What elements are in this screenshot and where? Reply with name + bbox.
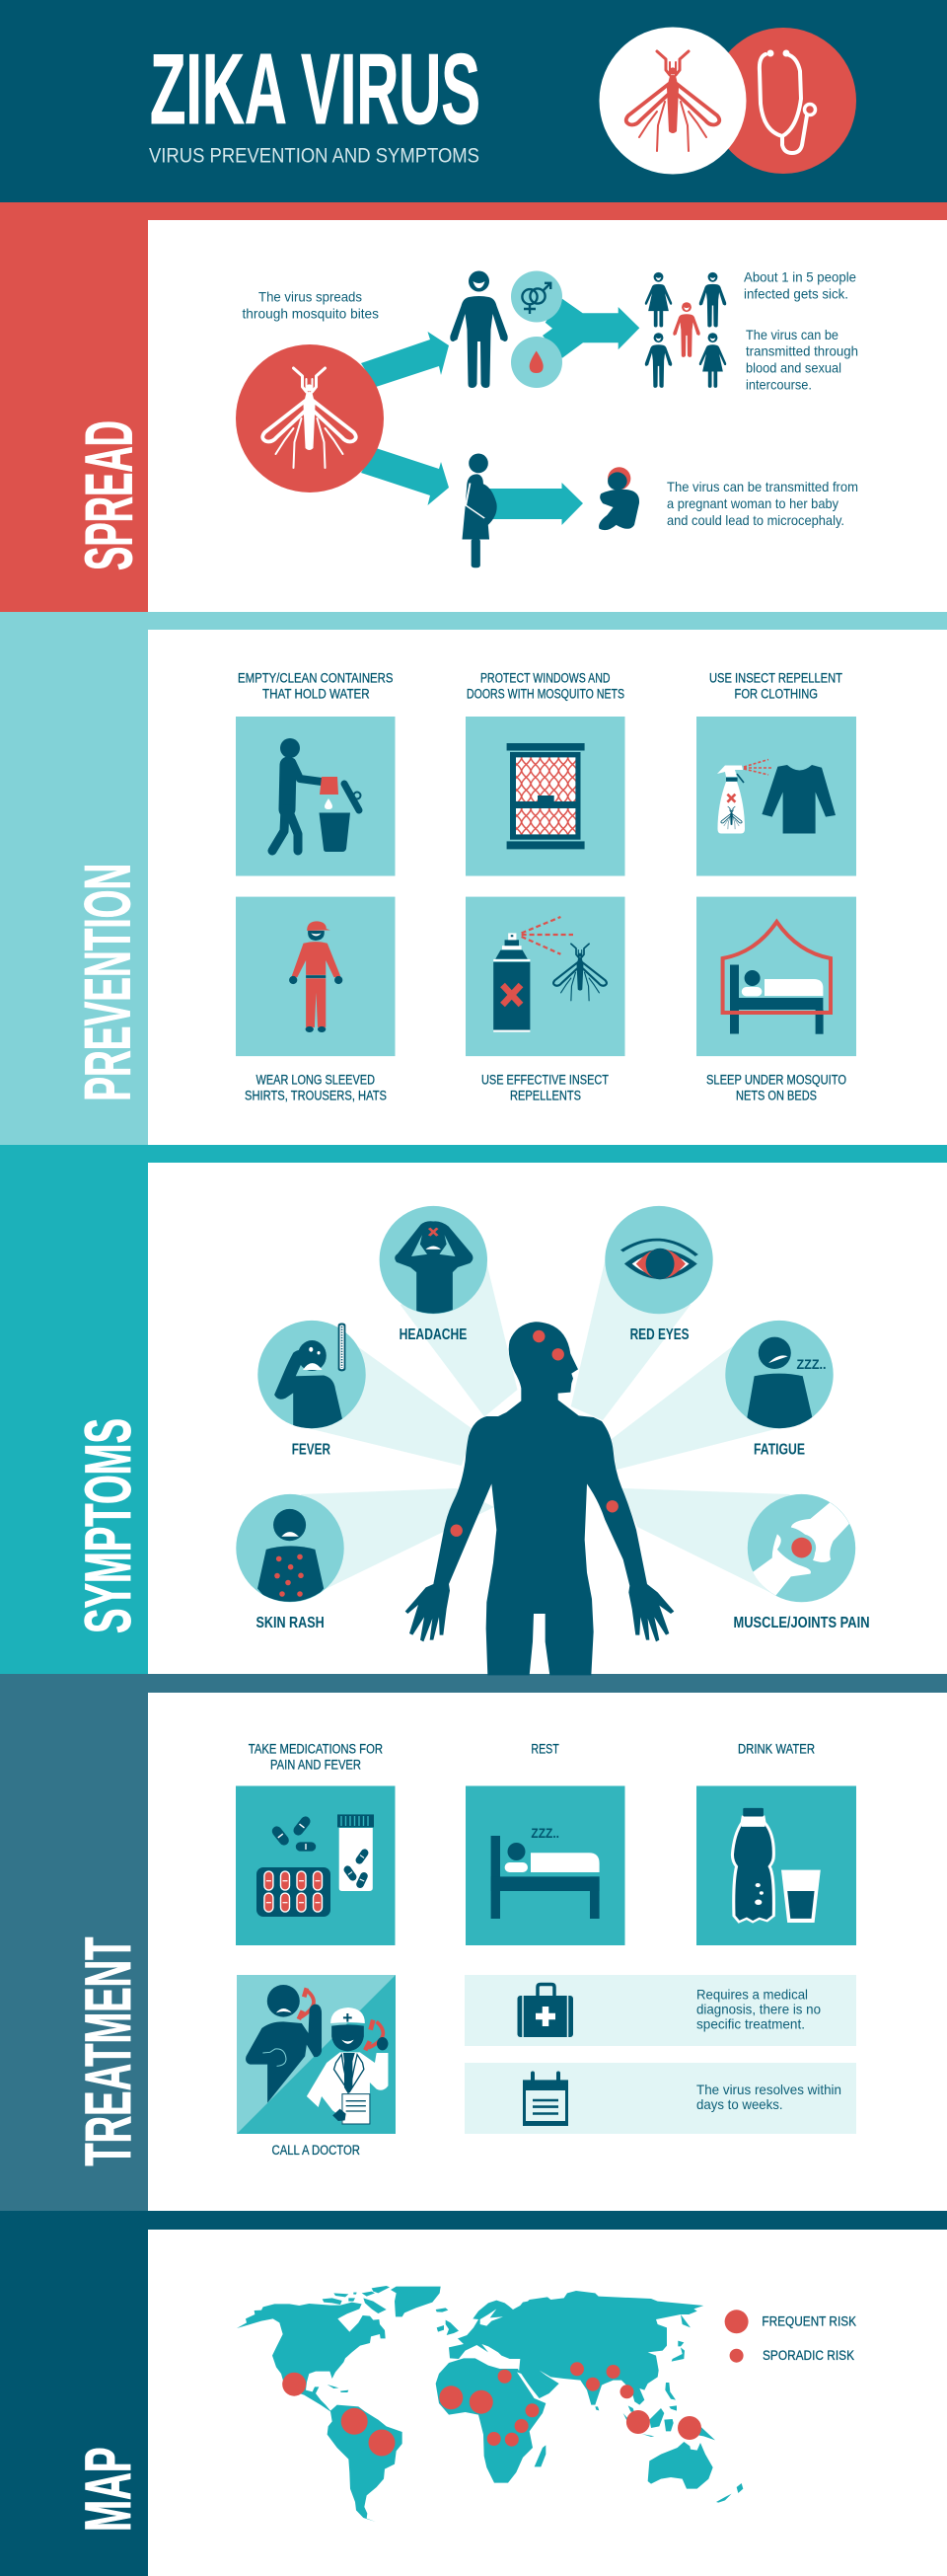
tile: emptying container	[236, 717, 395, 876]
icon: baby	[599, 467, 639, 530]
tile: medication	[236, 1786, 395, 1945]
text: blood and sexual transmission: transmitted through	[746, 343, 858, 359]
text: diagnosis	[696, 1986, 821, 2032]
icon: group of five people	[645, 272, 726, 388]
section band: symptoms	[0, 1145, 947, 1674]
icon: medical kit	[517, 1984, 573, 2037]
symptom: fatigue: ZZZ..	[797, 1357, 827, 1372]
section band: spread	[0, 202, 947, 612]
caption: repellents: REPELLENTS	[510, 1088, 581, 1103]
arrow: woman to baby	[483, 483, 583, 525]
text: mother to baby: a pregnant woman to her baby	[667, 495, 838, 511]
text: duration: days to weeks.	[696, 2096, 783, 2112]
caption: clothing repellent: FOR CLOTHING	[734, 687, 818, 701]
symptom label: fever: FEVER	[292, 1441, 330, 1458]
caption: containers	[238, 671, 393, 701]
caption: window nets: PROTECT WINDOWS AND	[480, 671, 611, 686]
subtitle: VIRUS PREVENTION AND SYMPTOMS	[149, 144, 479, 168]
icon: blood drop	[511, 337, 562, 388]
text: blood and sexual transmission: intercourse.	[746, 377, 812, 393]
text: mosquito bites: The virus spreads	[258, 289, 362, 305]
title: ZIKA VIRUS	[150, 35, 480, 145]
symptom label: red eyes: RED EYES	[630, 1326, 690, 1343]
symptom: red eyes	[605, 1206, 713, 1314]
text: mother to baby: and could lead to microcephaly.	[667, 512, 844, 528]
text: mosquito bites: through mosquito bites	[243, 306, 379, 322]
text: mosquito bites	[243, 289, 379, 322]
panel: map	[237, 2286, 856, 2522]
tile: long sleeves	[236, 897, 395, 1056]
text: duration: The virus resolves within	[696, 2082, 841, 2097]
symptom label: joint pain: MUSCLE/JOINTS PAIN	[734, 1615, 870, 1631]
arrow: merge to group	[543, 299, 639, 358]
caption: bed nets: NETS ON BEDS	[736, 1088, 817, 1103]
panel label: symptoms: SYMPTOMS	[71, 1418, 144, 1633]
section band: treatment	[0, 1674, 947, 2211]
tile: rest	[466, 1786, 625, 1945]
risk markers: frequent	[282, 2373, 701, 2456]
tile: clothing spray	[696, 717, 856, 876]
tile: insect spray	[466, 897, 625, 1056]
legend: SPORADIC RISK	[763, 2348, 854, 2363]
icon: mosquito badge	[236, 344, 384, 492]
caption: containers: EMPTY/CLEAN CONTAINERS	[238, 671, 393, 686]
panel label: map: MAP	[71, 2448, 144, 2532]
caption: clothing	[245, 1073, 387, 1103]
text: blood and sexual transmission: The virus can be	[746, 327, 838, 342]
body silhouette	[405, 1322, 674, 1675]
caption: call a doctor: CALL A DOCTOR	[272, 2143, 360, 2158]
section band: map	[0, 2211, 947, 2576]
symptom: joint pain	[747, 1494, 859, 1602]
symptom label: fatigue: FATIGUE	[754, 1441, 805, 1458]
caption: window nets	[467, 671, 624, 701]
caption: rest: REST	[531, 1741, 559, 1756]
icon: calendar	[523, 2073, 568, 2126]
text: 1 in 5: About 1 in 5 people	[744, 268, 856, 284]
text: blood and sexual transmission	[746, 327, 858, 393]
text: 1 in 5: infected gets sick.	[744, 286, 848, 302]
icon: mosquito	[600, 28, 746, 174]
panel label: prevention: PREVENTION	[71, 864, 144, 1101]
panel: prevention	[236, 671, 856, 1103]
panel: spread	[236, 268, 858, 568]
tile: drink water	[696, 1786, 856, 1945]
text: diagnosis: Requires a medical	[696, 1986, 808, 2002]
text: blood and sexual transmission: blood and sexual	[746, 360, 841, 376]
caption: drink water: DRINK WATER	[738, 1741, 815, 1756]
world map: Americas and Greenland	[237, 2286, 441, 2522]
panel label: spread: SPREAD	[71, 420, 146, 570]
icon: pregnant woman	[462, 453, 497, 568]
tile: window net	[466, 717, 625, 876]
icon: stethoscope	[710, 28, 856, 174]
legend	[725, 2310, 856, 2363]
caption: window nets: DOORS WITH MOSQUITO NETS	[467, 687, 624, 701]
symptom: fatigue	[725, 1321, 834, 1430]
section band: prevention	[0, 612, 947, 1145]
arrow: mosquito to pregnant woman	[361, 448, 449, 505]
caption: repellents: USE EFFECTIVE INSECT	[481, 1073, 609, 1088]
icon: person	[450, 270, 508, 388]
symptom: skin rash	[236, 1494, 344, 1604]
light beams	[301, 1260, 790, 1593]
caption: clothing: WEAR LONG SLEEVED	[256, 1073, 375, 1088]
tile: bed net	[696, 897, 856, 1056]
caption: containers: THAT HOLD WATER	[262, 687, 370, 701]
text: mother to baby: The virus can be transmitted from	[667, 479, 858, 494]
caption: medication: PAIN AND FEVER	[270, 1757, 361, 1772]
text: diagnosis: diagnosis, there is no	[696, 2002, 821, 2017]
header	[0, 0, 947, 202]
caption: repellents	[481, 1073, 609, 1103]
info row: duration	[465, 2063, 856, 2134]
text: 1 in 5	[744, 268, 856, 302]
symptom: fever	[257, 1321, 366, 1430]
panel: treatment	[236, 1741, 856, 2158]
symptom label: headache: HEADACHE	[400, 1326, 467, 1343]
caption: medication	[249, 1741, 383, 1772]
panel label: treatment: TREATMENT	[71, 1937, 144, 2166]
panel: symptoms	[236, 1206, 870, 1675]
legend: FREQUENT RISK	[762, 2314, 856, 2329]
world map: Europe, Africa, Asia, Oceania	[436, 2291, 743, 2503]
symptom label: skin rash: SKIN RASH	[256, 1615, 325, 1631]
tile: call a doctor	[237, 1975, 396, 2134]
arrow: mosquito to person	[361, 332, 449, 387]
text: diagnosis: specific treatment.	[696, 2016, 805, 2032]
pain dots on body	[450, 1330, 619, 1537]
risk markers: sporadic	[487, 2362, 633, 2447]
caption: clothing repellent: USE INSECT REPELLENT	[709, 671, 842, 686]
text: mother to baby	[667, 479, 858, 528]
icon: sexual transmission	[511, 270, 562, 322]
text: duration	[696, 2082, 841, 2112]
caption: clothing repellent	[709, 671, 842, 701]
info row: diagnosis	[465, 1975, 856, 2046]
caption: bed nets: SLEEP UNDER MOSQUITO	[706, 1073, 846, 1088]
caption: bed nets	[706, 1073, 846, 1103]
symptom: headache	[380, 1206, 487, 1315]
tile: rest: ZZZ..	[531, 1826, 559, 1841]
caption: medication: TAKE MEDICATIONS FOR	[249, 1741, 383, 1756]
caption: clothing: SHIRTS, TROUSERS, HATS	[245, 1088, 387, 1103]
